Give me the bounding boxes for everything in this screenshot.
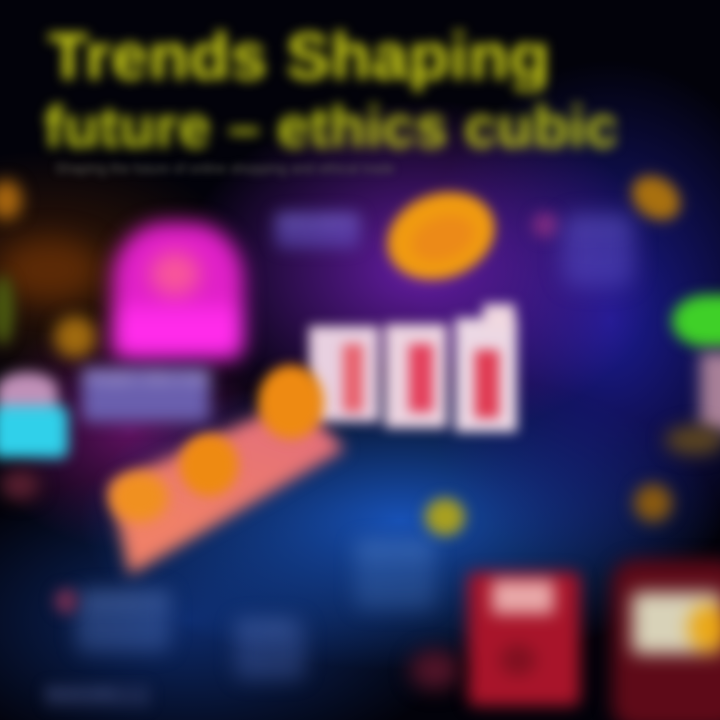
icon: right dark-gold shape (665, 425, 720, 455)
icon: dark red wallet (612, 560, 720, 720)
wallet card (632, 592, 720, 654)
ball: orange 1 (110, 472, 168, 522)
title line 2: future – ethics cubic (44, 95, 619, 160)
text block: bottom left (45, 685, 150, 707)
ball: orange 2 (180, 434, 238, 496)
box label (492, 580, 554, 614)
ball: orange 3 (258, 365, 324, 439)
decorative red glow (410, 650, 460, 690)
bag highlight (150, 252, 200, 296)
bar 2 (409, 344, 433, 412)
bar top accent (483, 304, 515, 330)
bar 1 (343, 344, 363, 412)
bar 3 (475, 350, 499, 418)
icon: right lower coin (634, 484, 672, 522)
text block: lower centre (355, 540, 435, 610)
chart column 3 (455, 318, 517, 432)
icon: red shopping box (468, 572, 580, 706)
subtitle: Shaping the future of online shopping and ethical trade (55, 160, 394, 176)
icon: top right coin (623, 167, 689, 229)
text block: lower middle (235, 618, 305, 680)
icon: small gold coin (54, 316, 96, 358)
icon: orange coin (375, 178, 507, 294)
icon: lower left dot (54, 588, 78, 614)
label card: left mid (82, 368, 210, 422)
chart column 1 (309, 326, 379, 422)
title (38, 21, 623, 160)
wallet coin (688, 604, 720, 652)
decorative dark pink glow (0, 470, 40, 500)
text label: purple top (275, 212, 360, 248)
text block: lower left (76, 590, 170, 652)
icon: gold coin center (425, 498, 465, 536)
bag base (112, 307, 244, 357)
chart: white and red bars (299, 294, 527, 442)
chart column 2 (385, 324, 447, 428)
cake band (0, 406, 68, 458)
icon: cyan cake (0, 362, 79, 469)
ramp shape (100, 395, 345, 575)
icon: top-left coin (0, 180, 22, 220)
icon: right pink panel (700, 352, 720, 432)
arrow: salmon rising ramp (99, 404, 353, 584)
icon: magenta shopping bag (112, 222, 244, 360)
box mark (500, 644, 536, 676)
cake top (0, 372, 58, 408)
icon: red dot (532, 212, 558, 238)
text block: bottom left: Source notes (45, 685, 116, 699)
icon: left green figure (0, 275, 14, 345)
text block: lower middle: Fair trade (235, 618, 291, 633)
coin inner (406, 208, 480, 269)
text label: purple right (562, 215, 634, 287)
icon: green device (672, 295, 720, 347)
decorative brown cluster (0, 240, 100, 300)
